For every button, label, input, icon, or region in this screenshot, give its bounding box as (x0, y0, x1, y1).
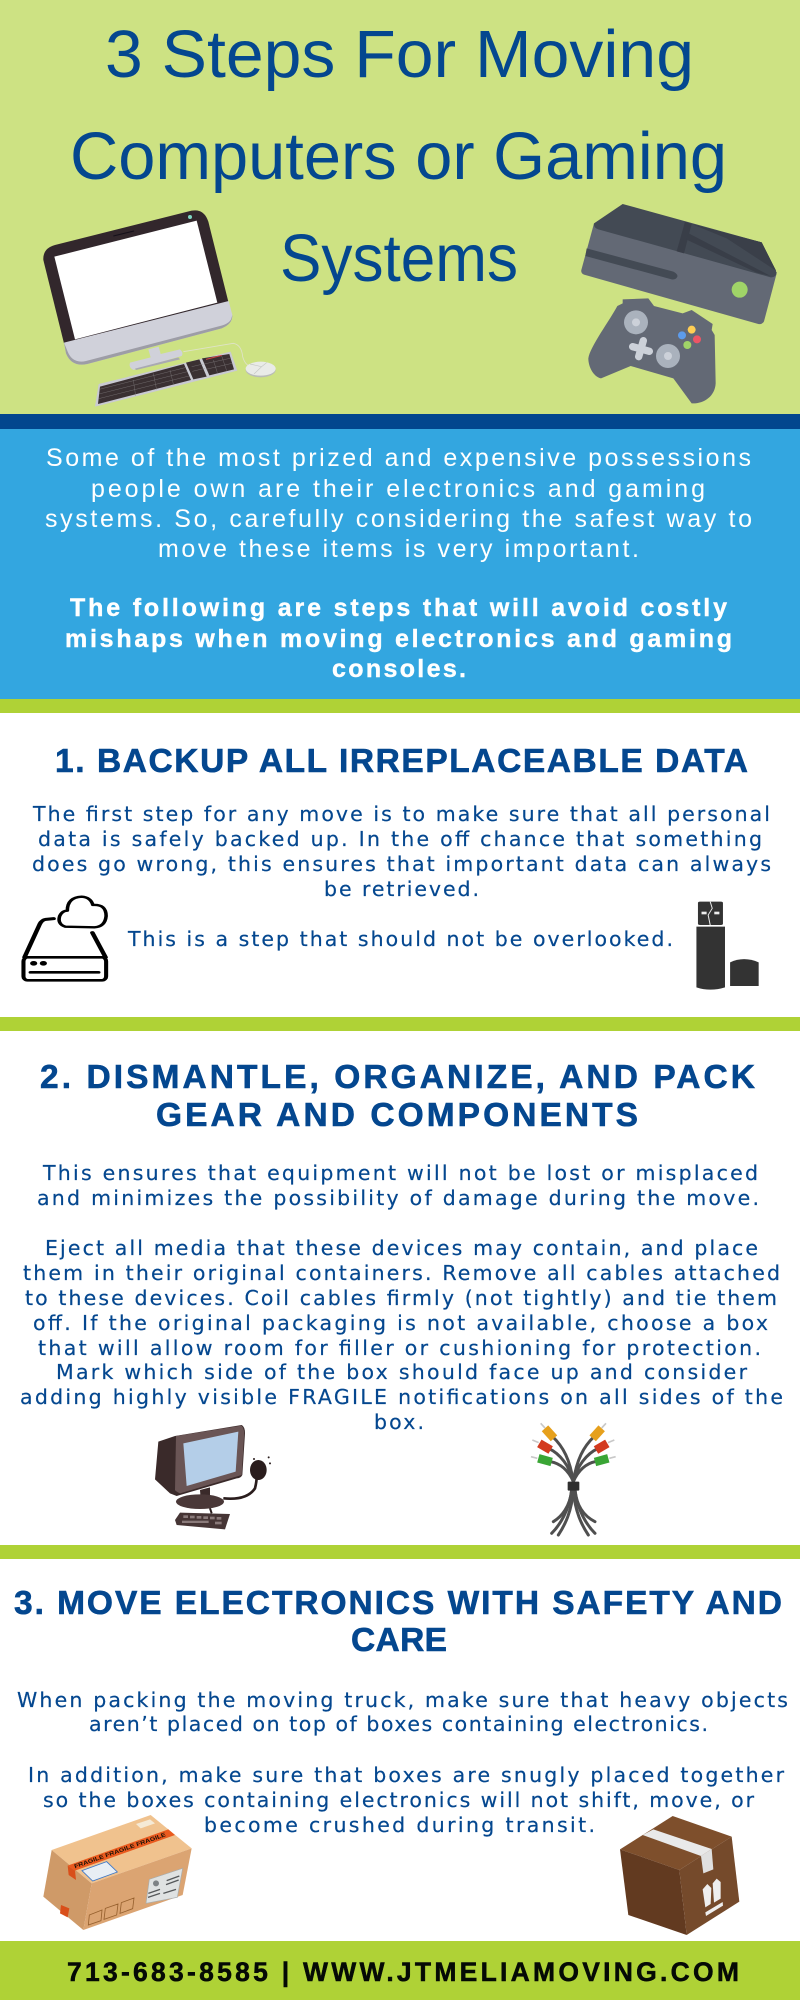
text: step 2 body: Eject all media that these devices may contain, and place (45, 1236, 758, 1260)
title (70, 17, 727, 296)
panel: footer: 713-683-8585 | WWW.JTMELIAMOVING.COM (67, 1957, 739, 1987)
intro text: move these items is very important. (158, 535, 639, 563)
icon: game console and controller (581, 204, 777, 403)
green divider bar 3 (0, 1545, 800, 1559)
panel: footer (0, 1941, 800, 2000)
green divider bar 1 (0, 699, 800, 713)
icon: cloud hard drive (23, 897, 106, 980)
text: step 3 body: When packing the moving truck, make sure that heavy objects (17, 1688, 788, 1712)
heading: step 3: CARE (351, 1622, 447, 1659)
heading: step 2: GEAR AND COMPONENTS (156, 1097, 638, 1134)
text: step 1 body: This is a step that should not be overlooked. (127, 927, 673, 951)
green divider bar 2 (0, 1017, 800, 1031)
intro text (45, 444, 752, 683)
icon: unplugged computer monitor (155, 1425, 271, 1529)
text: step 2 body: Mark which side of the box should face up and consider (56, 1360, 748, 1384)
title: Systems (280, 221, 518, 296)
text: step 2 body: box. (374, 1410, 424, 1434)
title: 3 Steps For Moving (105, 17, 694, 92)
intro text: people own are their electronics and gaming (91, 475, 705, 503)
heading: step 2: 2. DISMANTLE, ORGANIZE, AND PACK (40, 1059, 755, 1096)
text: step 3 body: aren’t placed on top of boxes containing electronics. (89, 1712, 708, 1736)
text: step 2 body (20, 1161, 783, 1434)
heading: step 3: 3. MOVE ELECTRONICS WITH SAFETY AND (14, 1585, 782, 1622)
text: step 2 body: off. If the original packaging is not available, choose a box (33, 1311, 768, 1335)
intro text: mishaps when moving electronics and gaming (65, 625, 732, 653)
title: Computers or Gaming (70, 119, 727, 194)
text: step 1 body (32, 802, 771, 951)
text: step 1 body: The first step for any move is to make sure that all personal (32, 802, 770, 826)
text: step 2 body: to these devices. Coil cables firmly (not tightly) and tie them (25, 1286, 777, 1310)
text: step 2 body: and minimizes the possibility of damage during the move. (37, 1186, 759, 1210)
icon: brown shipping box (620, 1816, 739, 1935)
header divider bar (0, 414, 800, 429)
icon: USB flash drive (696, 902, 759, 990)
text: step 2 body: them in their original containers. Remove all cables attached (23, 1261, 780, 1285)
icon: bundled AV cables (531, 1423, 616, 1535)
panel: header background (0, 0, 800, 414)
text: step 1 body: be retrieved. (324, 877, 479, 901)
intro text: The following are steps that will avoid costly (70, 594, 727, 622)
text: step 3 body (17, 1688, 788, 1837)
panel: intro background (0, 429, 800, 699)
intro text: Some of the most prized and expensive possessions (46, 444, 751, 472)
intro text: consoles. (332, 655, 466, 683)
text: step 3 body: so the boxes containing electronics will not shift, move, or (43, 1788, 755, 1812)
text: step 1 body: does go wrong, this ensures that important data can always (32, 852, 771, 876)
text: step 3 body: In addition, make sure that boxes are snugly placed together (28, 1763, 785, 1787)
intro text: systems. So, carefully considering the safest way to (45, 505, 752, 533)
heading: step 2 (40, 1059, 755, 1134)
text: step 3 body: become crushed during transit. (204, 1813, 595, 1837)
icon: fragile cardboard box (43, 1815, 192, 1930)
text: step 2 body: This ensures that equipment will not be lost or misplaced (42, 1161, 758, 1185)
heading: step 3 (14, 1585, 782, 1659)
text: step 2 body: that will allow room for filler or cushioning for protection. (38, 1336, 761, 1360)
text: step 2 body: adding highly visible FRAGILE notifications on all sides of the (20, 1385, 783, 1409)
heading: step 1: 1. BACKUP ALL IRREPLACEABLE DATA (55, 743, 748, 780)
icon: fragile cardboard box: FRAGILE FRAGILE FRAGILE (74, 1832, 167, 1870)
text: step 1 body: data is safely backed up. In the off chance that something (38, 827, 762, 851)
icon: desktop computer with keyboard and mouse (43, 210, 276, 407)
